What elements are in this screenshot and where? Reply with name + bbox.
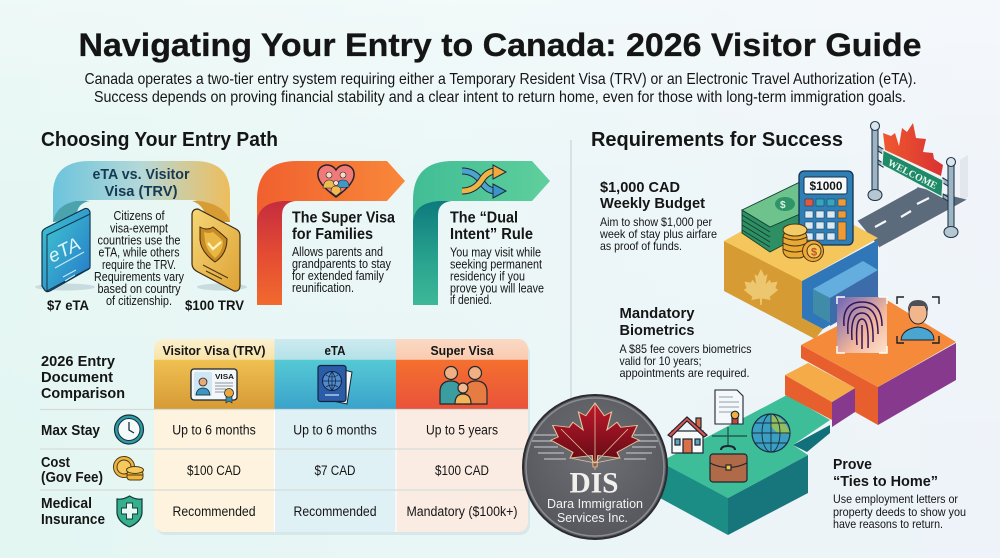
text block: ties to home: “Ties to Home” (833, 473, 938, 490)
row: medical insurance (41, 495, 518, 528)
icon: globe (752, 414, 790, 452)
text block: weekly budget: as proof of funds. (600, 239, 682, 253)
column headers (162, 343, 494, 358)
panel: super visa (257, 161, 405, 305)
row: max stay: Up to 6 months (293, 422, 377, 438)
text block: mandatory biometrics: Mandatory (620, 305, 695, 322)
row: max stay: Up to 5 years (426, 422, 498, 438)
heading: dual intent (450, 210, 533, 243)
row: cost: Cost (41, 454, 70, 471)
icon: crossing arrows (462, 165, 506, 198)
heading: super visa: The Super Visa (292, 210, 395, 226)
panel: dual intent (413, 161, 550, 307)
text block: citizens: Citizens of (114, 209, 165, 223)
text block: weekly budget: Aim to show $1,000 per (600, 215, 712, 229)
text block: mandatory biometrics: appointments are required. (620, 366, 750, 380)
text block: citizens: visa-exempt (110, 222, 168, 236)
icon: coins: $ (811, 246, 817, 258)
text block: citizens: Requirements vary (94, 270, 185, 284)
label: $7 eTA: $7 eTA (47, 297, 89, 313)
text block: dual intent: prove you will leave (450, 282, 544, 296)
panel: comparison table (40, 339, 530, 535)
icon: calculator: $1000 (810, 179, 843, 193)
logo name: Services Inc. (557, 511, 628, 525)
text block: weekly budget (599, 179, 717, 253)
icon: document (715, 390, 743, 424)
arch title: Visa (TRV) (104, 184, 178, 200)
text block: dual intent (450, 246, 544, 307)
row: max stay: Up to 6 months (172, 422, 256, 438)
text block: dual intent: residency if you (450, 270, 525, 284)
row: medical insurance: Mandatory ($100k+) (406, 504, 518, 519)
icon: family (440, 366, 487, 404)
text block: citizens (94, 209, 185, 308)
table heading: Comparison (41, 385, 125, 402)
subtitle: Success depends on proving financial stability and a clear intent to return home, even for those with long-term immigration goals. (94, 89, 906, 106)
text block: weekly budget: Weekly Budget (600, 195, 705, 212)
icon: eTA booklet: eTA (45, 234, 84, 267)
logo: DIS badge (523, 395, 667, 539)
icon: clock (114, 415, 144, 444)
column headers: eTA (324, 343, 346, 358)
text block: weekly budget: week of stay plus airfare (599, 227, 717, 241)
row: cost: (Gov Fee) (41, 469, 103, 486)
row: cost: $7 CAD (314, 463, 356, 478)
text block: citizens: require the TRV. (102, 258, 176, 272)
row: medical insurance: Recommended (172, 504, 256, 519)
icon: coins (114, 456, 144, 480)
text block: citizens: countries use the (98, 234, 181, 248)
icon: passport (318, 366, 352, 404)
icon: coins (783, 224, 824, 262)
text block: mandatory biometrics: Biometrics (620, 322, 694, 339)
icon: fingerprint (837, 297, 887, 353)
row: medical insurance: Recommended (294, 504, 376, 519)
text block: ties to home: property deeds to show you (833, 505, 966, 519)
text block: super visa (292, 245, 392, 295)
arrow banner (413, 161, 550, 305)
row: cost (41, 454, 489, 486)
text block: super visa: Allows parents and (292, 245, 383, 259)
text block: super visa: reunification. (292, 281, 354, 295)
table heading: 2026 Entry (41, 353, 116, 370)
text block: mandatory biometrics (620, 305, 752, 380)
arrow banner (257, 161, 405, 305)
table columns (154, 339, 528, 532)
row: medical insurance: Insurance (41, 511, 105, 528)
text block: dual intent: if denied. (450, 293, 492, 307)
icon: maple leaf emblem (744, 269, 778, 305)
icon: visa card: VISA (215, 374, 234, 381)
row: cost: $100 CAD (435, 463, 489, 478)
heading: super visa: for Families (292, 226, 373, 243)
icon: gate posts (868, 122, 958, 238)
arch banner (53, 161, 230, 222)
text block: ties to home: have reasons to return. (833, 517, 943, 531)
heading: super visa (292, 210, 395, 243)
text block: citizens: eTA, while others (98, 246, 180, 260)
icon: money stack (742, 182, 800, 252)
road (857, 155, 968, 248)
table heading: Document (41, 369, 113, 386)
icon: maple leaf (883, 123, 943, 176)
row: cost: $100 CAD (187, 463, 241, 478)
logo initials: DIS (570, 466, 618, 500)
icon: eTA booklet (35, 208, 95, 292)
illustration: orange biometrics platform (785, 297, 956, 427)
icon: person scan (897, 297, 939, 343)
subtitle (84, 71, 916, 106)
text block: citizens: of citizenship. (106, 294, 172, 308)
logo name: Dara Immigration (547, 497, 643, 511)
text block: citizens: based on country (98, 282, 181, 296)
heading: dual intent: Intent” Rule (450, 226, 533, 243)
heading: dual intent: The “Dual (450, 210, 518, 226)
column headers: Super Visa (430, 343, 494, 358)
text block: ties to home: Use employment letters or (833, 492, 958, 506)
icon: visa card (191, 369, 237, 403)
column headers: Visitor Visa (TRV) (162, 343, 266, 358)
text block: ties to home (833, 456, 966, 531)
heading: requirements for success: Requirements for Success (591, 128, 843, 151)
icon: briefcase (710, 446, 747, 482)
illustration: road and welcome gate (857, 122, 968, 248)
text block: dual intent: You may visit while (450, 246, 541, 260)
icon: family heart (318, 165, 354, 197)
illustration: yellow budget platform (724, 171, 878, 339)
row: medical insurance: Medical (41, 495, 92, 512)
row: max stay (41, 415, 498, 444)
icon: shield (117, 496, 142, 527)
connector cross (712, 427, 747, 447)
arch title: eTA vs. Visitor (92, 167, 190, 183)
text block: super visa: for extended family (292, 269, 385, 283)
welcome sign: WELCOME (886, 158, 939, 192)
text block: mandatory biometrics: A $85 fee covers biometrics (620, 342, 752, 356)
icon: house (668, 417, 707, 453)
logo name (547, 497, 643, 525)
table heading (41, 353, 125, 402)
illustration: teal ties to home platform (660, 390, 830, 535)
icon: red maple leaf (551, 403, 639, 470)
icon: TRV booklet (192, 209, 247, 291)
panel: eTA vs visitor visa (35, 161, 247, 313)
text block: super visa: grandparents to stay (292, 257, 392, 271)
row: max stay: Max Stay (41, 422, 101, 439)
text block: weekly budget: $1,000 CAD (600, 179, 680, 196)
text block: dual intent: seeking permanent (450, 258, 542, 272)
title: Navigating Your Entry to Canada: 2026 Visitor Guide (78, 27, 922, 63)
arch title (92, 167, 190, 200)
icon: calculator (799, 171, 853, 245)
heading: choosing your entry path: Choosing Your Entry Path (41, 128, 278, 151)
label: $100 TRV: $100 TRV (185, 297, 245, 313)
text block: mandatory biometrics: valid for 10 years; (620, 354, 702, 368)
text block: ties to home: Prove (833, 456, 872, 473)
icon: money stack: $ (780, 200, 786, 211)
